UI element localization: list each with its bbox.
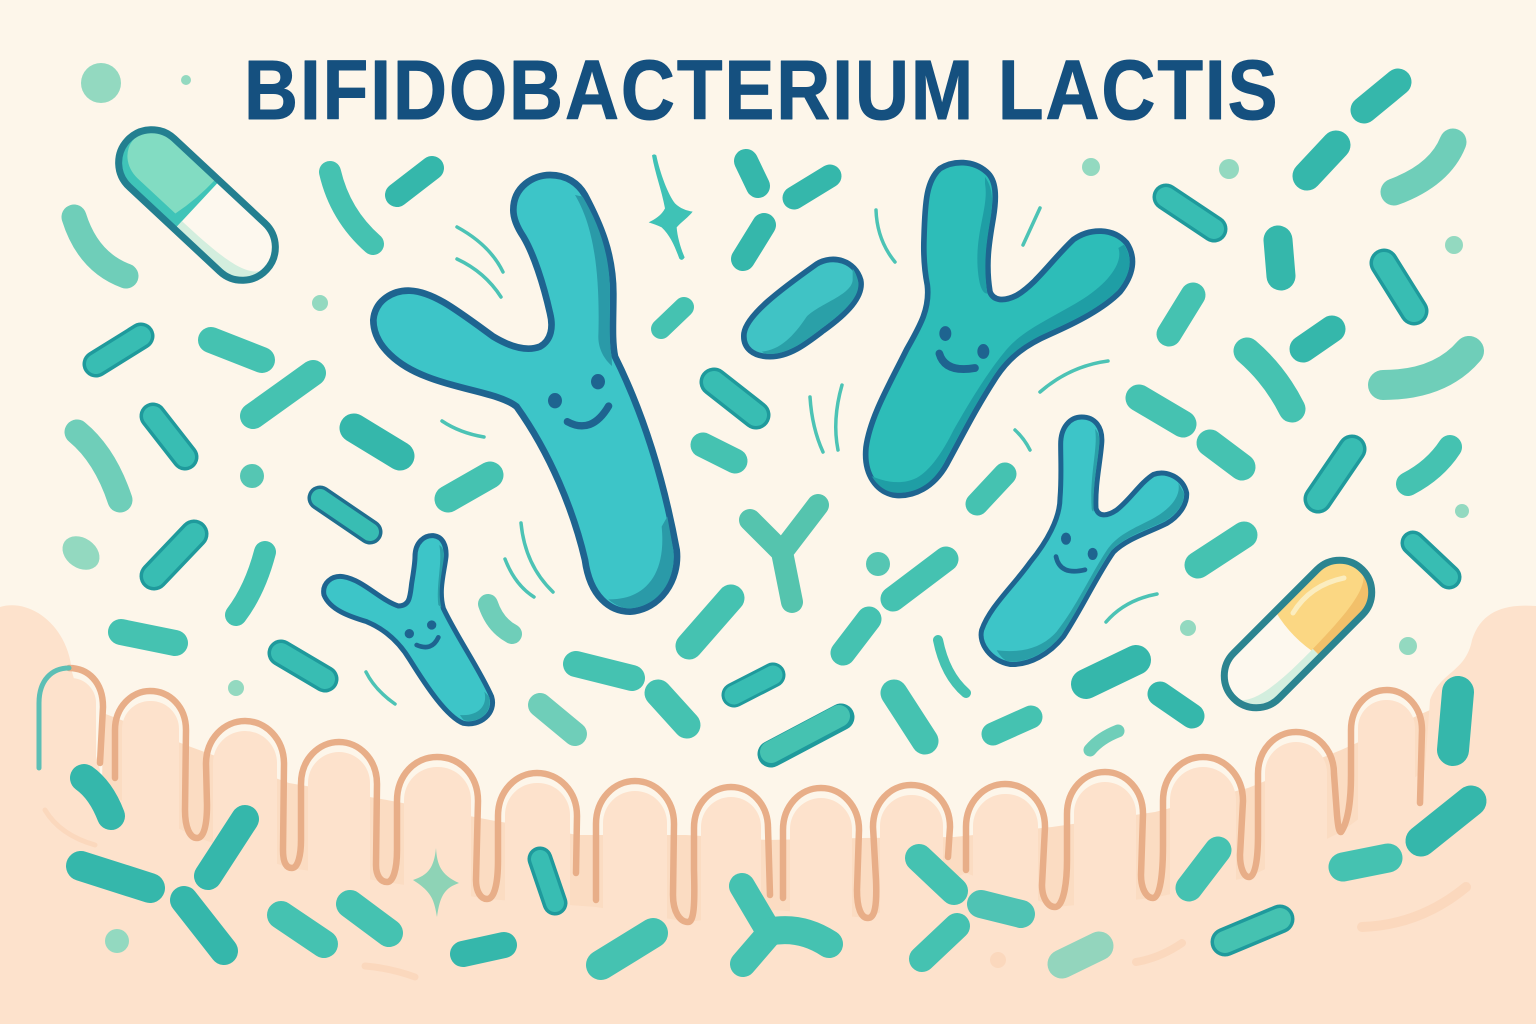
rods: bacteria within the tissue [81,692,1471,965]
small decorative dots [56,63,1469,953]
motion lines [366,208,1157,704]
rods: outlined dark teal bacteria [96,197,1449,754]
bacterium: large smiling Y left [373,175,677,612]
capsule: yellow pill [1211,547,1385,721]
capsule: mint pill [105,116,289,294]
bacterium: small smiling Y right [981,417,1187,664]
bacterium: small smiling Y left [324,536,493,724]
icon: sparkle lower [413,848,459,917]
icon: sparkle upper [649,154,693,260]
bacterium: large smiling Y right [866,163,1132,496]
rods: plain teal bacteria [74,82,1469,750]
bacterium: outlined oval rod [744,259,861,357]
title: BIFIDOBACTERIUM LACTIS [244,43,1279,137]
intestinal villi outline [39,668,1422,922]
intestinal tissue background [0,605,1536,1024]
